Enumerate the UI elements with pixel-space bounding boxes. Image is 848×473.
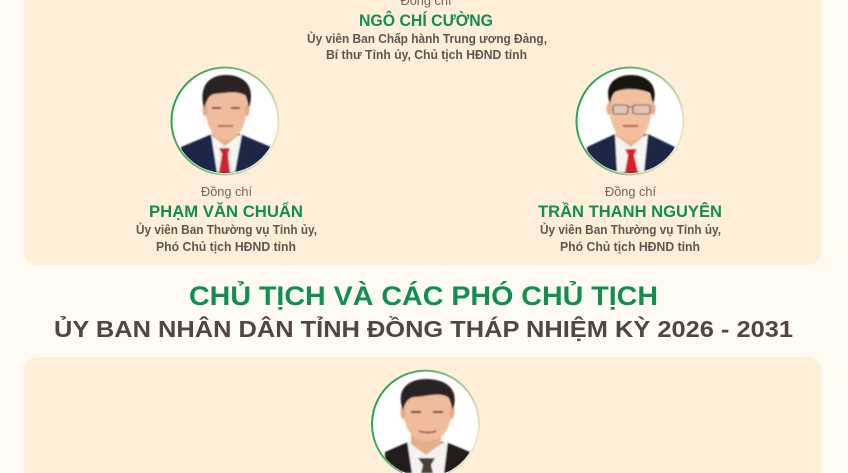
chairman text block: Bí thư Tỉnh ủy, Chủ tịch HĐND tỉnh (326, 48, 527, 62)
Phạm Văn Chuẩn text block: Ủy viên Ban Thường vụ Tỉnh ủy, (136, 222, 317, 237)
heading: section title: CHỦ TỊCH VÀ CÁC PHÓ CHỦ TỊCH (189, 279, 658, 311)
Trần Thanh Nguyên text block: Đồng chí (605, 185, 657, 199)
chairman text block: Ủy viên Ban Chấp hành Trung ương Đảng, (307, 31, 547, 46)
chairman text block (307, 0, 547, 62)
Trần Thanh Nguyên text block: Phó Chủ tịch HĐND tỉnh (560, 240, 700, 254)
Phạm Văn Chuẩn text block (136, 185, 317, 254)
heading: section subtitle: ỦY BAN NHÂN DÂN TỈNH ĐỒNG THÁP NHIỆM KỲ 2026 - 2031 (54, 314, 793, 342)
portrait: People's Committee chairman (372, 371, 479, 473)
panel: People's Committee leaders (24, 357, 821, 473)
Phạm Văn Chuẩn text block: PHẠM VĂN CHUẨN (149, 202, 303, 221)
portrait: Trần Thanh Nguyên (576, 68, 684, 180)
portrait: Phạm Văn Chuẩn (172, 68, 278, 180)
Phạm Văn Chuẩn text block: Đồng chí (201, 185, 253, 199)
Phạm Văn Chuẩn text block: Phó Chủ tịch HĐND tỉnh (156, 240, 296, 254)
panel: People's Council leaders (24, 0, 821, 265)
Trần Thanh Nguyên text block: Ủy viên Ban Thường vụ Tỉnh ủy, (540, 222, 721, 237)
Trần Thanh Nguyên text block (538, 185, 722, 254)
Trần Thanh Nguyên text block: TRẦN THANH NGUYÊN (538, 202, 722, 221)
chairman text block: NGÔ CHÍ CƯỜNG (359, 11, 493, 30)
